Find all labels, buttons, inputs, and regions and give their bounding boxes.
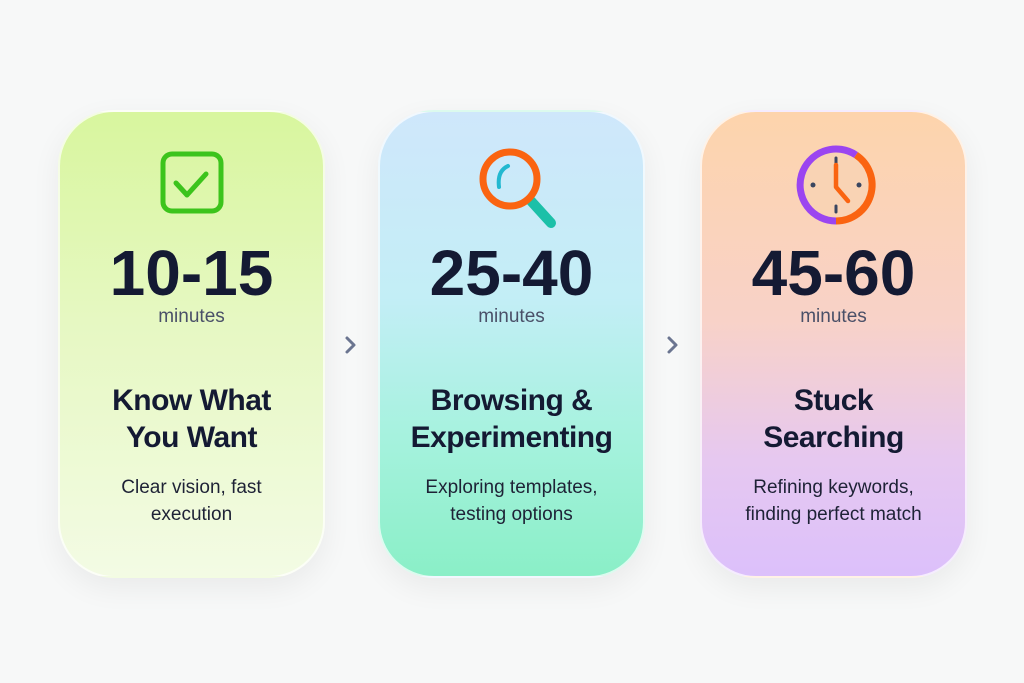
unit: minutes [158,306,225,327]
heading [411,384,612,454]
panel: browsing [378,110,645,578]
icon: magnifier [480,148,556,228]
arrow [345,336,356,354]
heading: Browsing & [431,384,592,417]
description: Refining keywords, [753,477,914,498]
icon: clock [796,146,876,224]
number: 25-40 [430,237,593,309]
heading [763,384,904,454]
heading: Experimenting [411,421,612,454]
description: Exploring templates, [425,477,598,498]
unit: minutes [800,306,867,327]
description: Clear vision, fast [121,477,262,498]
description [121,477,262,525]
heading: Searching [763,421,904,454]
panel: know what you want [58,110,325,578]
heading: Know What [112,384,271,417]
panel: stuck searching [700,110,967,578]
heading: Stuck [794,384,873,417]
description: testing options [450,504,573,525]
number: 10-15 [110,237,273,309]
heading [112,384,271,454]
description [425,477,598,525]
unit: minutes [478,306,545,327]
number: 45-60 [752,237,915,309]
description: finding perfect match [745,504,922,525]
description [745,477,922,525]
heading: You Want [126,421,257,454]
description: execution [151,504,232,525]
arrow [667,336,678,354]
icon: checkbox [160,152,224,214]
